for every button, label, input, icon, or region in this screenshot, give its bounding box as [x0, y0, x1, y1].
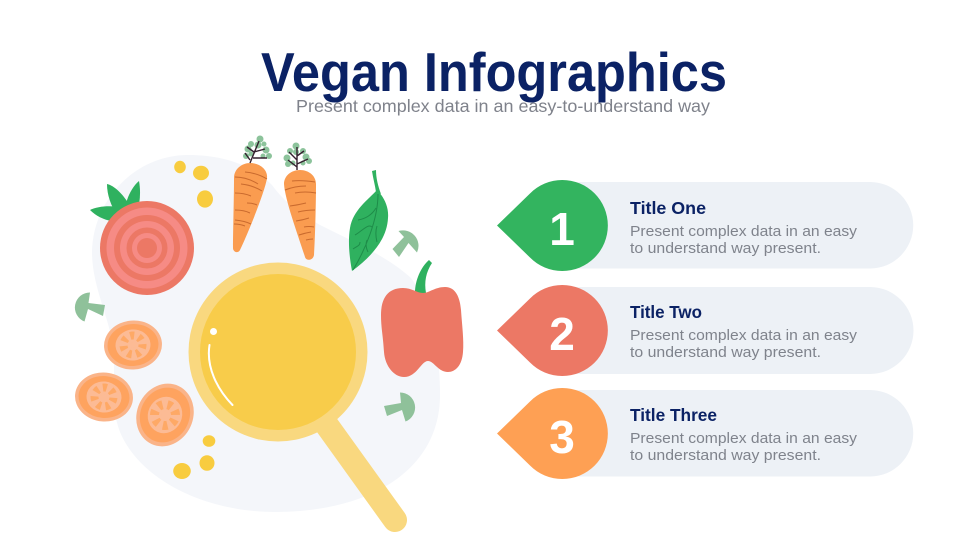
item description: to understand way present.	[630, 240, 821, 257]
pill background	[555, 390, 913, 476]
background blob	[92, 155, 440, 512]
number badge: red teardrop	[497, 285, 608, 376]
icon: sliced beet	[100, 201, 194, 295]
icon: tomato slice left	[73, 370, 135, 424]
icon: mushroom bottom right	[384, 392, 415, 422]
panel: item three	[497, 388, 913, 479]
item description: Present complex data in an easy	[630, 327, 858, 344]
number 3: 3	[549, 411, 575, 463]
icon: mushroom left	[75, 292, 105, 322]
icon: corn kernels	[173, 161, 215, 479]
item description: to understand way present.	[630, 447, 821, 464]
item title: Title One	[630, 198, 706, 218]
number 1: 1	[549, 203, 575, 255]
number 2: 2	[549, 308, 575, 360]
item description: Present complex data in an easy	[630, 430, 858, 447]
pill background	[555, 287, 914, 374]
icon: carrot one	[233, 136, 272, 252]
number badge: orange teardrop	[497, 388, 608, 479]
pill background	[555, 182, 913, 268]
subtitle: Present complex data in an easy-to-understand way	[296, 96, 710, 116]
icon: bell pepper	[381, 260, 463, 377]
icon: magnifying glass	[188, 262, 395, 520]
icon: tomato slice top	[102, 318, 164, 372]
panel: item one	[497, 180, 913, 271]
icon: mushroom top right	[392, 230, 419, 257]
icon: leaf	[349, 170, 388, 271]
item title: Title Three	[630, 405, 717, 425]
item description: to understand way present.	[630, 344, 821, 361]
icon: tomato slice bottom	[126, 374, 204, 456]
icon: carrot two	[284, 142, 316, 260]
item description: Present complex data in an easy	[630, 223, 858, 240]
panel: item two	[497, 285, 914, 376]
title: Vegan Infographics	[261, 41, 727, 103]
illustration: vegetables under a magnifying glass	[73, 136, 463, 520]
item title: Title Two	[630, 302, 702, 322]
number badge: green teardrop	[497, 180, 608, 271]
icon: beet leaves	[90, 181, 140, 221]
